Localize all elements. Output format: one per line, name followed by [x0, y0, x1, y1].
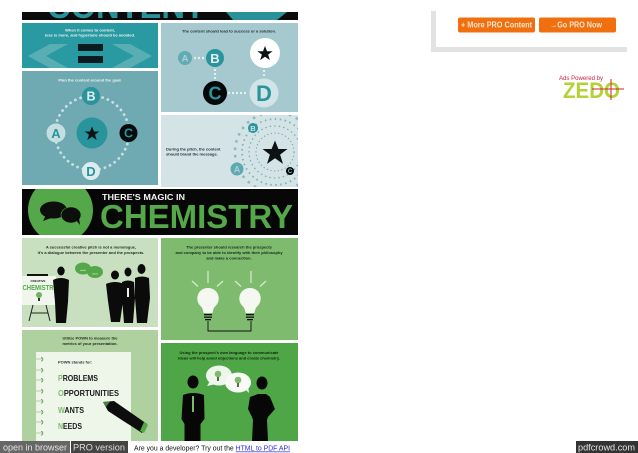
panel: brand the message	[161, 115, 298, 187]
panel: lead to success: A	[182, 54, 189, 64]
notepad: NEEDS	[58, 422, 83, 431]
icon: pencil	[103, 401, 148, 433]
icon: green circle with speech bubbles	[28, 189, 93, 235]
logo: ZEDO ads: Ads Powered by	[559, 76, 603, 82]
button: open in browser: open in browser	[3, 442, 67, 452]
woman silhouette	[248, 376, 275, 441]
panel: plan around the goal: A	[51, 126, 61, 141]
speech bubbles: ...	[80, 266, 86, 273]
panel: POWN	[22, 330, 158, 442]
button: PRO version: PRO version	[73, 442, 125, 452]
speech bubbles with bulbs	[206, 366, 251, 393]
panel: prospect's language: ideas will help avoid objections and create chemistry.	[178, 356, 280, 360]
panel: brand the message: B	[250, 124, 256, 133]
presentation board: CREATIVE	[31, 279, 45, 283]
button: more PRO content: + More PRO Content	[461, 20, 532, 30]
panel: brand the message: C	[288, 169, 293, 175]
panel: plan around the goal: Plan the content around the goal.	[58, 78, 122, 82]
button: go PRO now	[539, 18, 616, 32]
button: go PRO now: →Go PRO Now	[550, 20, 603, 30]
logo: ZEDO ads: ZEDO	[563, 78, 620, 103]
icon: light bulbs	[197, 288, 261, 331]
panel: dialogue: A successful creative pitch is not a monologue,	[46, 244, 136, 250]
panel: plan around the goal: D	[86, 164, 96, 179]
chemistry banner: CHEMISTRY	[100, 198, 293, 235]
notepad: PROBLEMS	[58, 374, 99, 383]
gray frame	[434, 11, 627, 50]
panel: plan around the goal: B	[86, 90, 96, 104]
panel: lead to success	[161, 23, 298, 112]
badge: pdfcrowd.com: pdfcrowd.com	[578, 442, 635, 452]
panel: POWN: Utilize POWN to measure the	[63, 336, 118, 340]
panel: lead to success: C	[208, 84, 222, 104]
presentation board	[22, 274, 56, 321]
panel: research the prospects	[161, 238, 298, 340]
notepad	[32, 352, 131, 442]
panel: avoid hyperbole	[22, 23, 158, 68]
presenter silhouette	[53, 266, 69, 323]
panel: lead to success: D	[256, 81, 272, 106]
prospects silhouettes	[106, 264, 150, 323]
panel: brand the message: should brand the message.	[166, 152, 218, 156]
panel: research the prospects: and make a connection.	[206, 256, 252, 260]
panel: prospect's language	[161, 343, 298, 441]
panel: research the prospects: and company to be able to identify with their philosophy	[175, 250, 283, 255]
panel: research the prospects: The presenter should research the prospects	[186, 244, 273, 250]
presentation board: CHEMISTR	[22, 283, 54, 292]
panel: plan around the goal: C	[124, 126, 133, 140]
speech bubbles	[75, 262, 103, 278]
man silhouette	[182, 376, 204, 441]
panel: lead to success: B	[210, 51, 220, 66]
panel: avoid hyperbole: When it comes to content,	[65, 28, 115, 32]
speech bubbles: ...	[92, 270, 98, 276]
panel: dialogue	[22, 238, 158, 327]
panel: brand the message: A	[234, 164, 241, 174]
panel: dialogue: it's a dialogue between the presenter and the prospects.	[38, 250, 144, 255]
panel: POWN: metrics of your presentation.	[62, 341, 118, 346]
notepad: POWN stands for:	[58, 360, 92, 364]
top content banner	[22, 12, 298, 20]
panel: lead to success: The content should lead to success or a solution.	[182, 28, 276, 34]
panel: brand the message: During the pitch, the content	[166, 146, 221, 152]
notepad: OPPORTUNITIES	[58, 389, 120, 398]
footer bar	[0, 441, 638, 453]
chemistry banner: THERE'S MAGIC IN	[102, 192, 185, 202]
panel: avoid hyperbole: less is more, and hyperbole should be avoided.	[45, 32, 135, 38]
chemistry banner	[22, 189, 298, 235]
notepad: WANTS	[58, 406, 85, 415]
button: more PRO content	[458, 18, 535, 32]
panel: prospect's language: Using the prospect's own language to communicate	[180, 350, 279, 355]
panel: plan around the goal	[22, 71, 158, 185]
developer promo text: Are you a developer? Try out the HTML to PDF API	[134, 446, 290, 452]
